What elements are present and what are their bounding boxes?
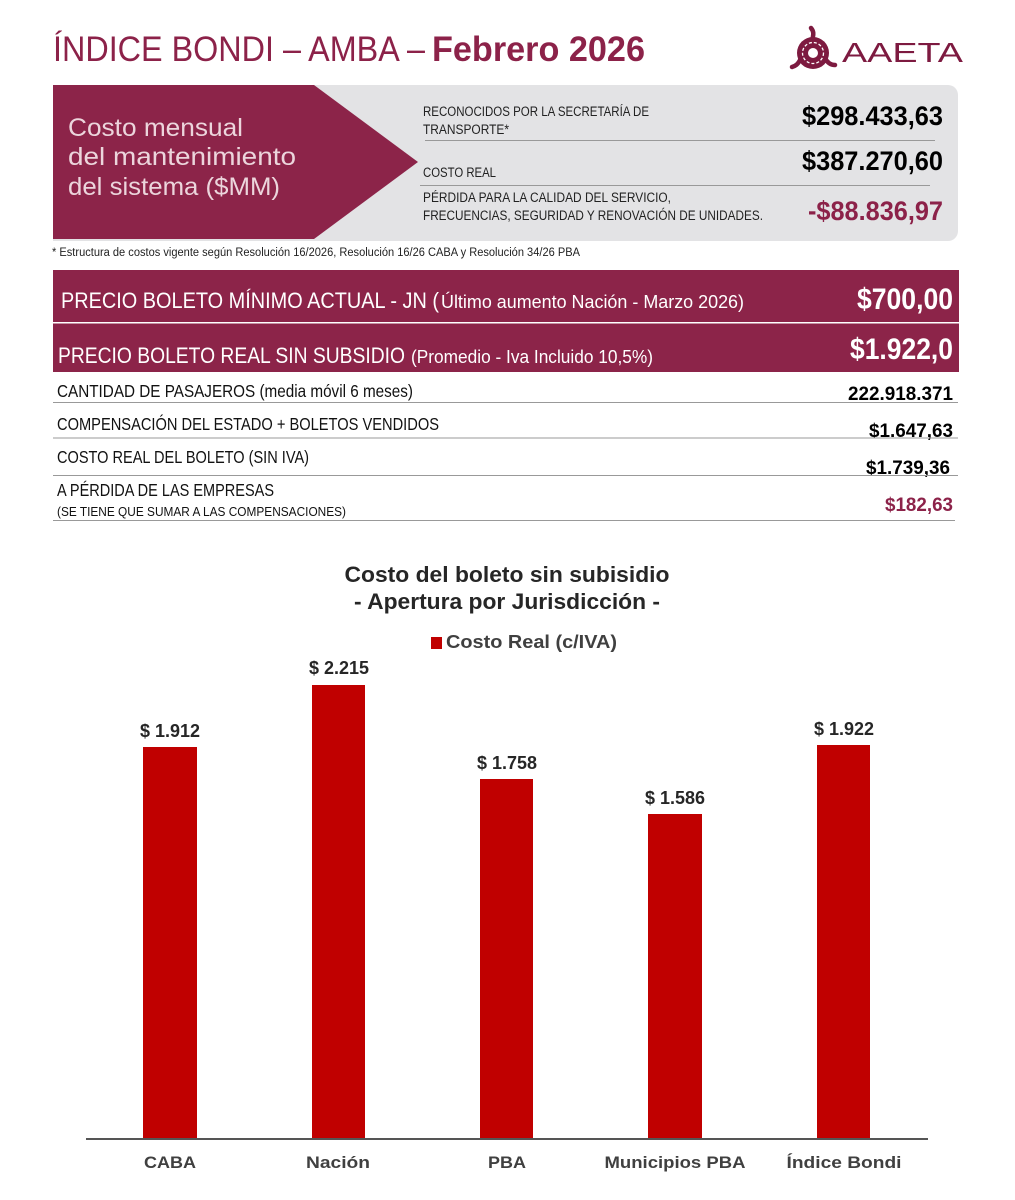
bar: CABA: CABA: [144, 1153, 196, 1172]
logo wordmark: AAETA: [842, 37, 963, 68]
banner text: del mantenimiento: [68, 143, 296, 171]
panel background: [53, 85, 958, 241]
row: pérdida: -$88.836,97: [808, 196, 943, 226]
row: costo real: $387.270,60: [802, 146, 943, 176]
bar: PBA: $ 1.758: [477, 753, 537, 773]
bar: Nación: Nación: [306, 1153, 370, 1172]
chart legend: Costo Real (c/IVA): [446, 632, 617, 652]
row: pérdida: FRECUENCIAS, SEGURIDAD Y RENOVACIÓN DE UNIDADES.: [423, 208, 763, 223]
axis line: [86, 1138, 928, 1140]
bar: PBA: PBA: [488, 1153, 526, 1172]
arrow banner: [53, 85, 418, 239]
row: reconocidos: TRANSPORTE*: [423, 122, 510, 137]
banner text: [68, 114, 296, 201]
row: costo real del boleto: $1.739,36: [866, 458, 950, 479]
row: compensación: $1.647,63: [869, 421, 953, 442]
band: precio boleto mínimo: [53, 270, 959, 322]
logo: AAETA: [792, 28, 963, 69]
row: compensación: COMPENSACIÓN DEL ESTADO + BOLETOS VENDIDOS: [57, 413, 439, 434]
band: precio boleto real: (Promedio - Iva Incluido 10,5%): [411, 347, 653, 367]
band: precio boleto mínimo: PRECIO BOLETO MÍNIMO ACTUAL - JN (: [61, 288, 440, 313]
band: precio boleto real: $1.922,0: [850, 333, 953, 366]
row: pérdida: [423, 190, 943, 226]
row: costo real: [423, 146, 943, 180]
footnote: * Estructura de costos vigente según Resolución 16/2026, Resolución 16/26 CABA y Resolución 34/26 PBA: [52, 247, 580, 259]
row: costo real del boleto: [53, 447, 958, 479]
bar: CABA: [140, 721, 200, 1172]
title: [53, 30, 645, 69]
bar: CABA: $ 1.912: [140, 721, 200, 741]
bar: Nación: $ 2.215: [309, 658, 369, 678]
row: costo real: COSTO REAL: [423, 165, 496, 180]
row: pérdida de las empresas: $182,63: [885, 495, 953, 516]
title: Febrero 2026: [432, 30, 645, 69]
title: ÍNDICE BONDI – AMBA –: [53, 30, 425, 69]
icon: road roundabout: [792, 28, 835, 69]
row: cantidad de pasajeros: CANTIDAD DE PASAJEROS (media móvil 6 meses): [57, 381, 413, 401]
bar: Índice Bondi: $ 1.922: [814, 719, 874, 739]
row: reconocidos: [423, 101, 943, 137]
band: precio boleto mínimo: Último aumento Nación - Marzo 2026): [441, 291, 744, 312]
bar: Índice Bondi: Índice Bondi: [786, 1153, 902, 1172]
panel: costo mensual: [53, 85, 958, 241]
band: precio boleto mínimo: $700,00: [857, 283, 953, 316]
row: pérdida de las empresas: (SE TIENE QUE SUMAR A LAS COMPENSACIONES): [57, 505, 346, 519]
row: costo real del boleto: COSTO REAL DEL BOLETO (SIN IVA): [57, 447, 309, 467]
row: pérdida de las empresas: [53, 480, 955, 521]
bar: Municipios PBA: $ 1.586: [645, 788, 705, 808]
row: pérdida de las empresas: A PÉRDIDA DE LAS EMPRESAS: [57, 480, 274, 500]
chart heading: - Apertura por Jurisdicción -: [354, 589, 660, 614]
chart heading: Costo del boleto sin subisidio: [344, 562, 670, 587]
row: reconocidos: $298.433,63: [802, 101, 943, 131]
bar: PBA: [477, 753, 537, 1172]
row: cantidad de pasajeros: [53, 381, 958, 405]
chart heading: [344, 562, 670, 614]
banner text: Costo mensual: [68, 114, 243, 142]
bar: Índice Bondi: [786, 719, 902, 1172]
bar chart: [86, 658, 928, 1172]
bar: Nación: [306, 658, 370, 1172]
bar: Municipios PBA: [604, 788, 746, 1172]
row: pérdida: PÉRDIDA PARA LA CALIDAD DEL SERVICIO,: [423, 190, 671, 205]
band: precio boleto real: PRECIO BOLETO REAL SIN SUBSIDIO: [58, 343, 405, 368]
band: precio boleto real: [53, 324, 959, 372]
bar: Municipios PBA: Municipios PBA: [604, 1153, 746, 1172]
row: cantidad de pasajeros: 222.918.371: [848, 384, 953, 405]
banner text: del sistema ($MM): [68, 173, 280, 201]
row: compensación: [53, 413, 958, 442]
row: reconocidos: RECONOCIDOS POR LA SECRETARÍA DE: [423, 104, 649, 119]
